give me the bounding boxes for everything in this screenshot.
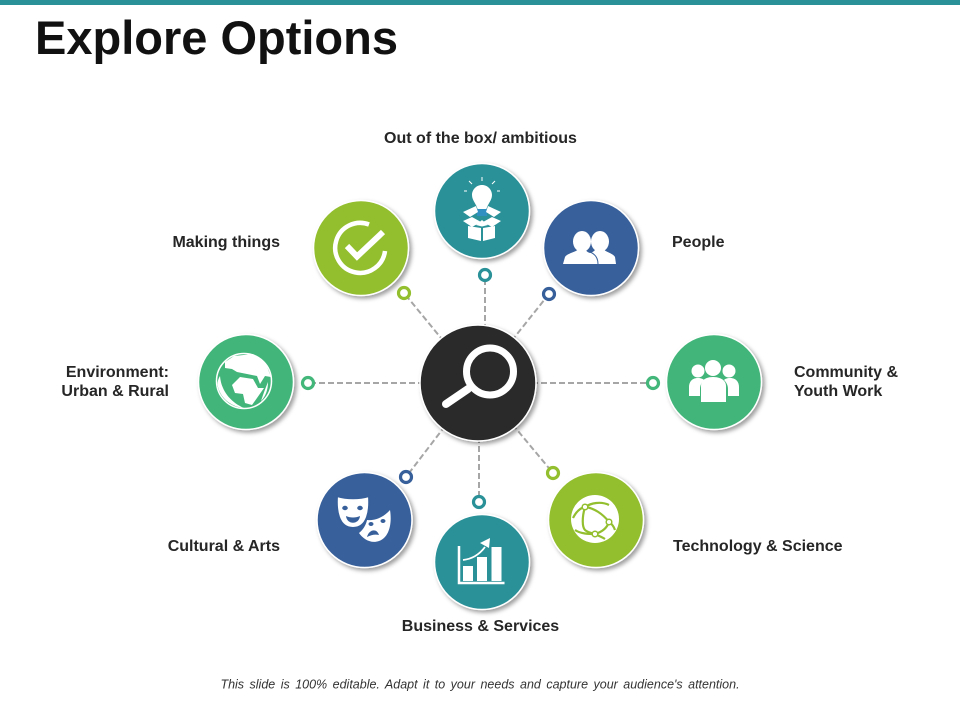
node: business (bar chart icon) — [434, 514, 530, 610]
label: people: People — [672, 234, 725, 251]
label: making things: Making things — [172, 234, 280, 251]
connector ring: business — [474, 496, 484, 508]
label: community: Youth Work — [794, 383, 882, 400]
node: community (group icon) — [666, 334, 762, 430]
label: community: Community & — [794, 364, 898, 381]
connector ring: environment — [302, 378, 314, 388]
connector ring: people — [544, 288, 554, 300]
top accent bar — [0, 0, 960, 5]
label: environment: Environment: — [66, 364, 169, 381]
node: people icon — [544, 200, 638, 296]
label: technology: Technology & Science — [673, 538, 843, 555]
connector ring: out of the box — [480, 270, 490, 280]
node: technology (network globe icon) — [548, 472, 644, 568]
title: Explore Options — [35, 11, 398, 64]
label: environment: Urban & Rural — [61, 383, 169, 400]
connector lines — [308, 275, 653, 502]
connector ring: cultural — [400, 472, 412, 482]
connector ring: making things — [398, 288, 410, 298]
footer note: This slide is 100% editable. Adapt it to your needs and capture your audience's attention. — [220, 678, 740, 692]
node: making things (check icon) — [314, 200, 408, 296]
label: business: Business & Services — [402, 618, 559, 635]
connector ring: technology — [548, 468, 558, 478]
node: cultural (theatre masks icon) — [317, 472, 412, 568]
label: cultural: Cultural & Arts — [168, 538, 280, 555]
node: environment (globe icon) — [198, 334, 294, 430]
connector ring: community — [648, 378, 658, 388]
node: out of the box (bulb and box icon) — [434, 164, 530, 258]
center node: magnifying glass — [420, 325, 536, 441]
label: out of the box: Out of the box/ ambitious — [384, 130, 577, 147]
